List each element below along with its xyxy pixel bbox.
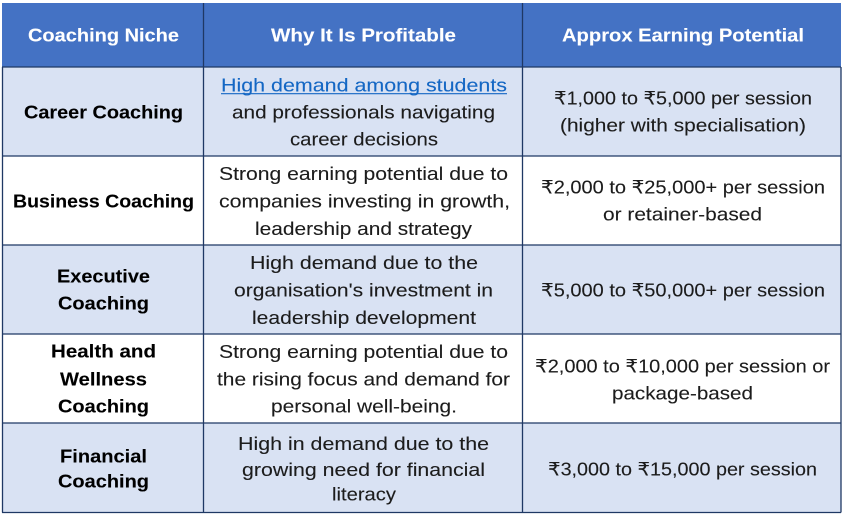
earnings: financial coaching: ₹3,000 to ₹15,000 per session xyxy=(548,458,817,480)
reason: financial coaching: growing need for financial xyxy=(242,459,485,480)
reason: career coaching xyxy=(221,74,507,150)
row: Business Coaching xyxy=(13,163,825,239)
reason: health and wellness coaching xyxy=(217,341,510,416)
reason: health and wellness coaching: Strong earning potential due to xyxy=(219,341,508,362)
niche name: Business Coaching: Business Coaching xyxy=(13,190,194,212)
earnings: career coaching: ₹1,000 to ₹5,000 per session xyxy=(554,88,812,108)
table header row xyxy=(2,3,841,67)
niche name: Health and Wellness Coaching xyxy=(51,340,156,416)
reason: business coaching: Strong earning potential due to xyxy=(219,163,508,184)
row: Health and Wellness Coaching xyxy=(51,340,830,416)
reason: career coaching: career decisions xyxy=(290,128,438,150)
reason: executive coaching: leadership development xyxy=(252,307,476,328)
earnings: business coaching: ₹2,000 to ₹25,000+ per session xyxy=(541,176,825,198)
reason: financial coaching: High in demand due to the xyxy=(238,433,489,454)
reason: financial coaching: literacy xyxy=(332,484,397,504)
reason: financial coaching xyxy=(238,433,489,504)
reason: health and wellness coaching: personal well-being. xyxy=(271,396,457,416)
earnings: business coaching xyxy=(541,176,825,224)
niche name: Financial Coaching xyxy=(58,446,149,492)
earnings: health and wellness coaching xyxy=(535,356,830,404)
reason: business coaching xyxy=(219,163,510,239)
row: Career Coaching xyxy=(2,67,841,156)
niche name: Health and Wellness Coaching: Coaching xyxy=(58,396,149,416)
heading: Why It Is Profitable: Why It Is Profitable xyxy=(271,24,456,46)
row: Financial Coaching xyxy=(2,423,841,512)
earnings: career coaching xyxy=(554,88,812,136)
heading: Coaching Niche: Coaching Niche xyxy=(28,24,179,46)
reason: business coaching: leadership and strategy xyxy=(255,218,473,239)
reason: career coaching: and professionals navigating xyxy=(232,102,495,122)
niche name: Health and Wellness Coaching: Wellness xyxy=(60,368,147,390)
reason: health and wellness coaching: the rising focus and demand for xyxy=(217,368,510,390)
niche name: Health and Wellness Coaching: Health and xyxy=(51,340,156,362)
niche name: Executive Coaching xyxy=(57,266,150,314)
niche name: Executive Coaching: Coaching xyxy=(58,292,149,314)
niche name: Career Coaching: Career Coaching xyxy=(24,102,183,122)
earnings: executive coaching: ₹5,000 to ₹50,000+ per session xyxy=(541,280,825,300)
row: Executive Coaching xyxy=(2,245,841,334)
earnings: business coaching: or retainer-based xyxy=(603,204,762,224)
reason: career coaching: High demand among students xyxy=(221,74,507,96)
reason: executive coaching: High demand due to the xyxy=(250,252,478,273)
earnings: career coaching: (higher with specialisation) xyxy=(560,114,806,136)
niche name: Executive Coaching: Executive xyxy=(57,266,150,286)
earnings: health and wellness coaching: package-based xyxy=(612,382,753,404)
niche name: Financial Coaching: Financial xyxy=(60,446,147,466)
niche name: Financial Coaching: Coaching xyxy=(58,470,149,492)
heading: Approx Earning Potential: Approx Earning Potential xyxy=(562,24,804,46)
reason: executive coaching: organisation's investment in xyxy=(234,280,493,300)
reason: business coaching: companies investing in growth, xyxy=(219,190,510,212)
earnings: health and wellness coaching: ₹2,000 to ₹10,000 per session or xyxy=(535,356,830,376)
reason: executive coaching xyxy=(234,252,493,328)
